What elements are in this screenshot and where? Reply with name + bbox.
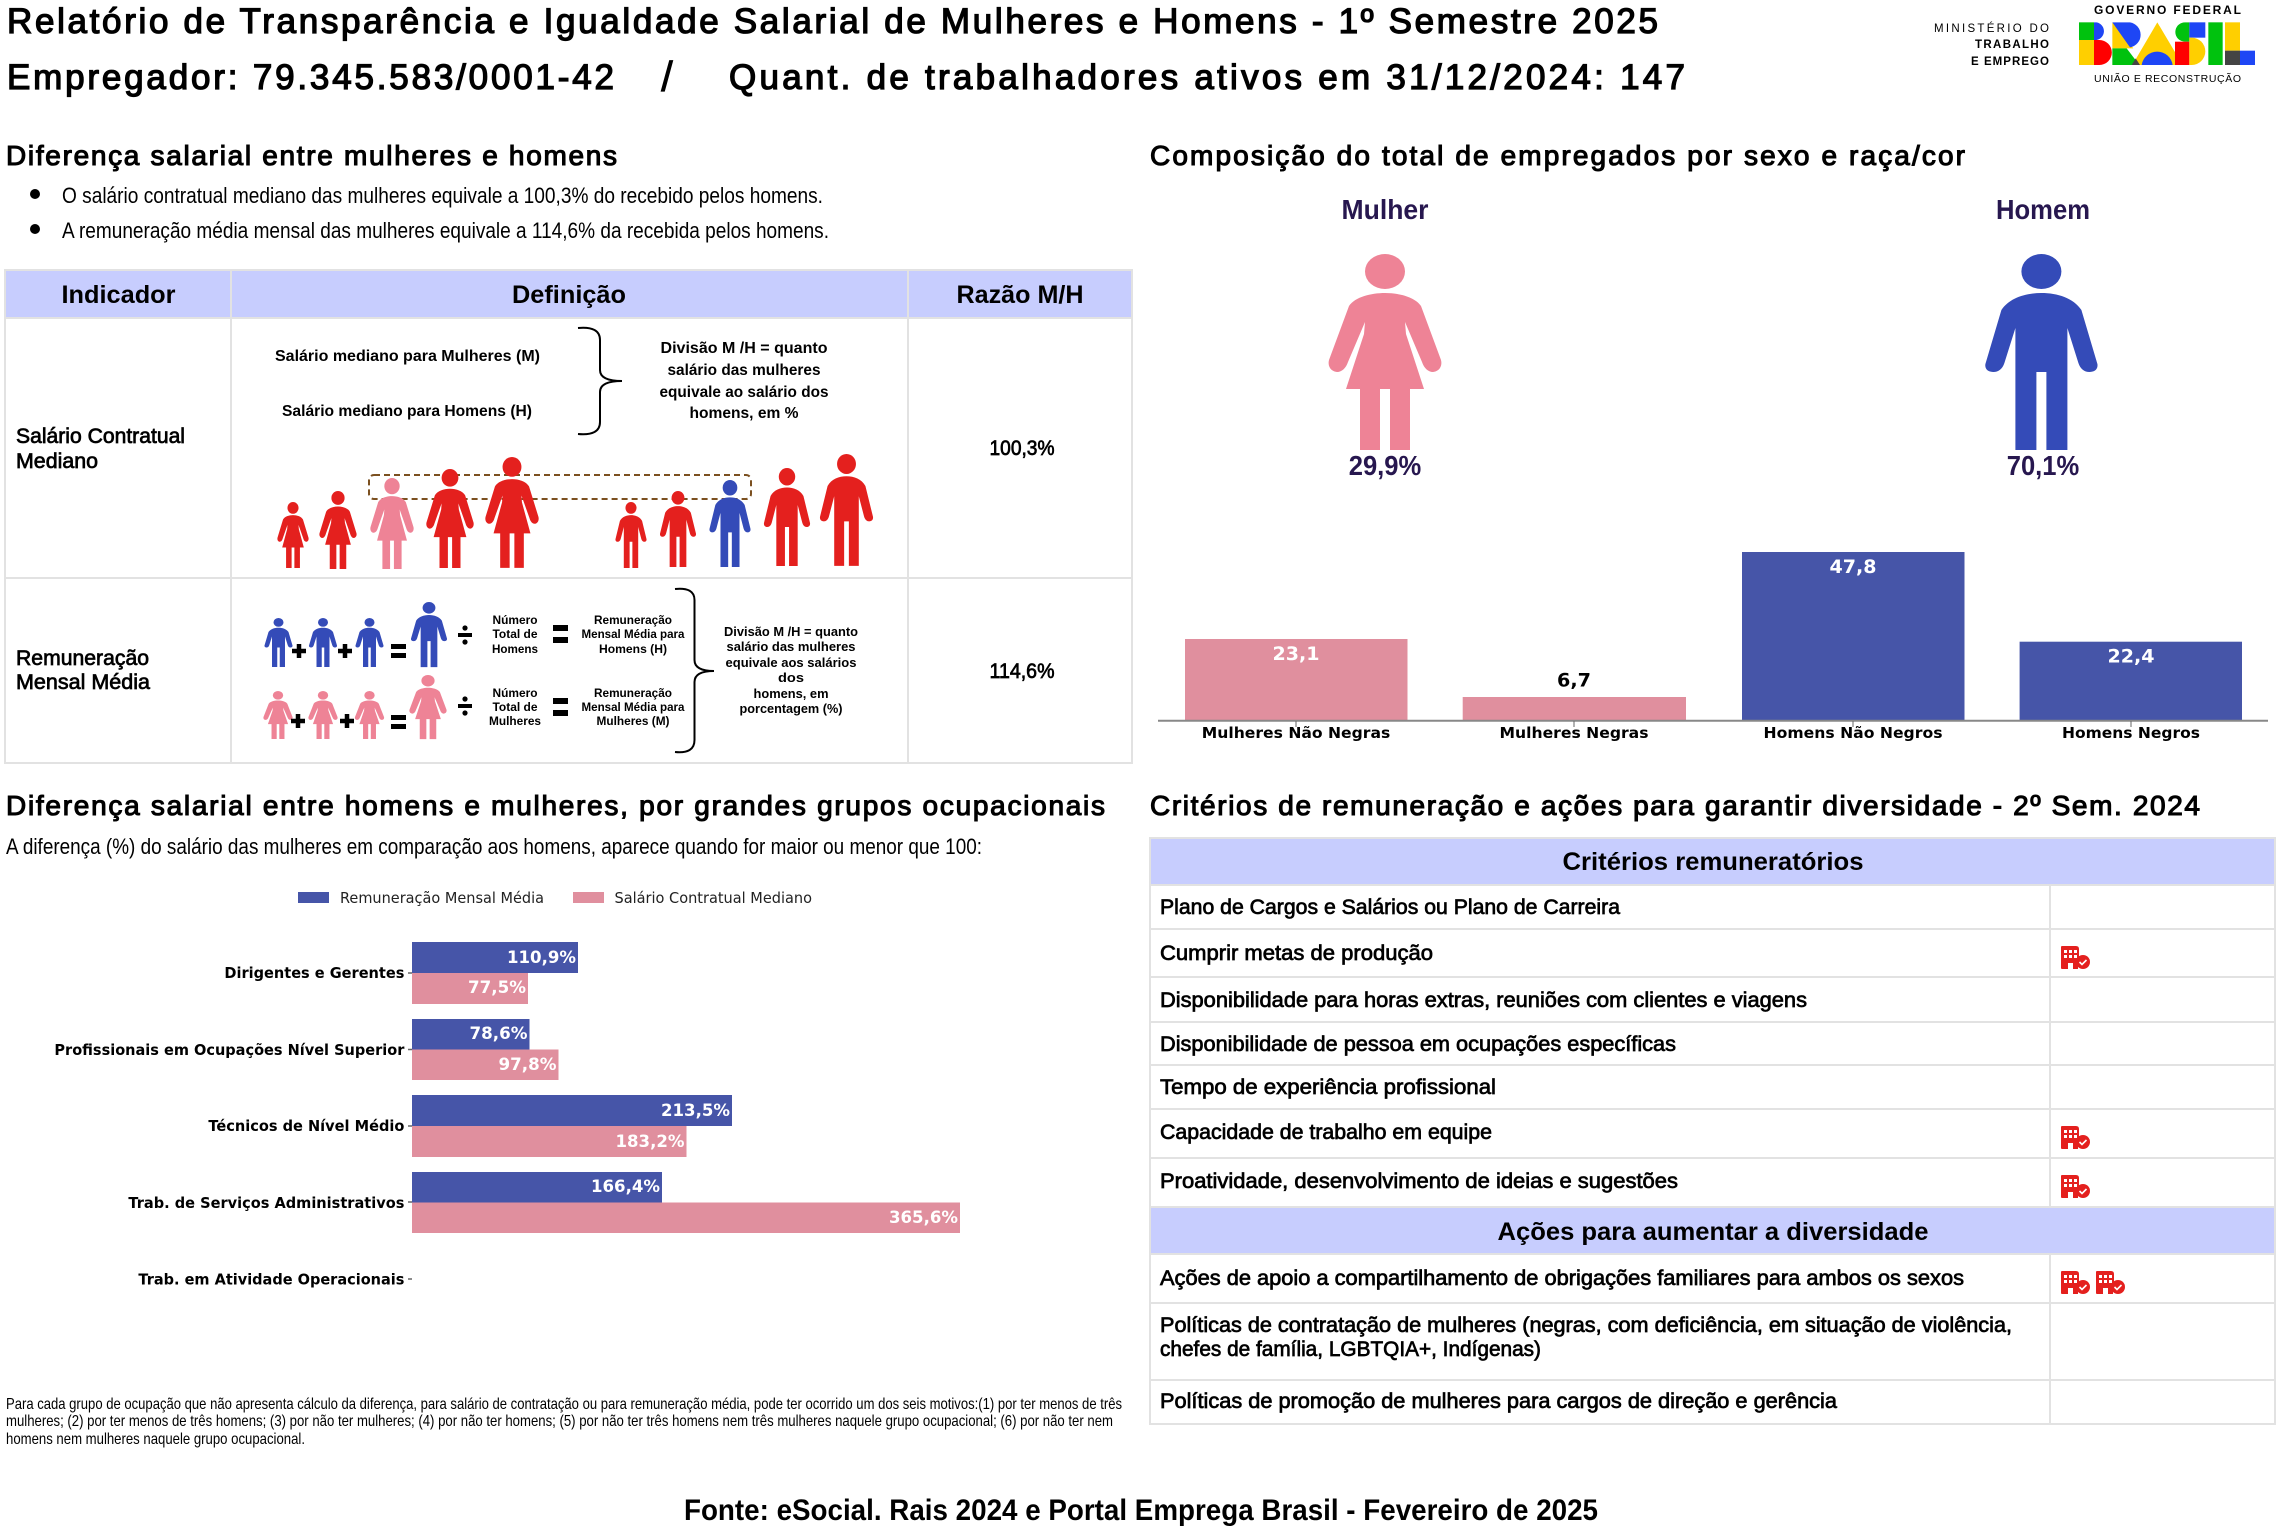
group: profissionais nível superior: 78,6%: [470, 1024, 528, 1044]
row label: remuneração mensal média: [16, 647, 150, 694]
row label: remuneração mensal média: Mensal Média: [16, 671, 150, 694]
formula labels: Número: [492, 686, 538, 700]
group: serviços administrativos: 365,6%: [889, 1208, 958, 1228]
brace and division text: [675, 589, 858, 752]
title: Empregador: 79.345.583/0001-42: [7, 58, 614, 97]
group: técnicos de nível médio: [208, 1095, 732, 1157]
pictogram: média de mulheres: [263, 675, 568, 739]
bar chart: sexo e raça/cor: 23,1: [1272, 643, 1320, 665]
criteria rows: Disponibilidade de pessoa em ocupações específicas: [1160, 1033, 1676, 1056]
section header: critérios remuneratórios: Critérios remuneratórios: [1562, 848, 1864, 876]
legend: Salário Contratual Mediano: [614, 889, 812, 907]
brace and division text: porcentagem (%): [740, 701, 842, 716]
formula labels: Mensal Média para: [582, 700, 685, 714]
definition: salário mediano: salário das mulheres: [668, 362, 821, 379]
percent: homem: 70,1%: [2007, 450, 2079, 481]
group: atividade operacionais: Trab. em Atividade Operacionais: [138, 1270, 404, 1288]
criteria rows: Plano de Cargos e Salários ou Plano de Carreira: [1160, 896, 1620, 919]
group: profissionais nível superior: Profissionais em Ocupações Nível Superior: [54, 1041, 405, 1059]
table header: Definição: [512, 281, 626, 309]
legend: [298, 889, 812, 907]
footnote: homens nem mulheres naquele grupo ocupacional.: [6, 1431, 305, 1448]
heading: critérios de remuneração: Critérios de remuneração e ações para garantir diversidade - 2º Sem. 2024: [1150, 790, 2200, 821]
panel: tabela de critérios: [1150, 838, 2275, 1424]
logo: ministério e governo federal: [1934, 3, 2255, 85]
title: /: [661, 53, 673, 100]
value: 114,6%: 114,6%: [990, 660, 1054, 683]
table header: [62, 281, 1084, 309]
bullet list: O salário contratual mediano das mulheres equivale a 100,3% do recebido pelos homens.: [62, 183, 823, 208]
heading: diferença salarial: Diferença salarial entre mulheres e homens: [6, 140, 617, 171]
definition: salário mediano: Divisão M /H = quanto: [660, 340, 828, 357]
section header: ações: Ações para aumentar a diversidade: [1498, 1218, 1929, 1246]
title: Quant. de trabalhadores ativos em 31/12/2024: 147: [729, 58, 1685, 97]
action rows: Políticas de contratação de mulheres (negras, com deficiência, em situação de violência,: [1160, 1314, 2012, 1337]
action rows: chefes de família, LGBTQIA+, Indígenas): [1160, 1338, 1541, 1361]
formula labels: Mulheres (M): [596, 714, 670, 728]
logo: ministério e governo federal: MINISTÉRIO DO: [1934, 22, 2049, 35]
logo: ministério e governo federal: TRABALHO: [1975, 39, 2049, 51]
definition: salário mediano: homens, em %: [690, 405, 798, 422]
formula labels: [489, 613, 685, 728]
icon: empresa em metas de produção: [2061, 946, 2090, 969]
action rows: Políticas de promoção de mulheres para cargos de direção e gerência: [1160, 1390, 1837, 1413]
row label: remuneração mensal média: Remuneração: [16, 647, 149, 670]
bullet list: [30, 183, 829, 243]
group: serviços administrativos: 166,4%: [591, 1177, 660, 1197]
panel: mulher: [1329, 194, 1441, 481]
panel: tabela de indicadores: [5, 270, 1132, 763]
row label: salário contratual mediano: [16, 425, 185, 473]
formula labels: Remuneração: [594, 686, 672, 700]
title: Relatório de Transparência e Igualdade Salarial de Mulheres e Homens - 1º Semestre 2025: [7, 2, 1658, 41]
footnote: mulheres; (2) por ter menos de três homens; (3) por não ter mulheres; (4) por não ter homens; (5) por não ter três homens nem três mulheres naquele grupo ocupacional; (6) por não ter nem: [6, 1413, 1113, 1430]
group: técnicos de nível médio: Técnicos de Nível Médio: [208, 1117, 404, 1135]
group: dirigentes e gerentes: 77,5%: [468, 978, 526, 998]
brace and division text: salário das mulheres: [726, 639, 856, 654]
bar chart: sexo e raça/cor: 6,7: [1557, 670, 1591, 692]
panel: homem: Homem: [1996, 194, 2090, 225]
group: dirigentes e gerentes: 110,9%: [507, 948, 576, 968]
definition: salário mediano: Salário mediano para Homens (H): [282, 403, 532, 420]
logo: ministério e governo federal: GOVERNO FEDERAL: [2094, 3, 2241, 17]
group: serviços administrativos: Trab. de Serviços Administrativos: [128, 1194, 404, 1212]
bar chart: sexo e raça/cor: 22,4: [2108, 646, 2154, 668]
source: Fonte: eSocial. Rais 2024 e Portal Emprega Brasil - Fevereiro de 2025: [684, 1494, 1598, 1527]
action rows: [1160, 1267, 2012, 1413]
formula labels: Homens: [492, 642, 538, 656]
criteria rows: Capacidade de trabalho em equipe: [1160, 1121, 1492, 1144]
pictogram: mediana de mulheres e homens: [277, 454, 873, 569]
formula labels: Número: [492, 613, 538, 627]
definition: salário mediano: [275, 328, 829, 434]
title: [7, 2, 1685, 100]
bar chart: sexo e raça/cor: Homens Negros: [2062, 724, 2200, 742]
heading: composição: Composição do total de empregados por sexo e raça/cor: [1150, 140, 1965, 171]
group: dirigentes e gerentes: [224, 942, 578, 1004]
criteria rows: Disponibilidade para horas extras, reuniões com clientes e viagens: [1160, 989, 1807, 1012]
group: dirigentes e gerentes: Dirigentes e Gerentes: [224, 964, 404, 982]
percent: mulher: 29,9%: [1349, 450, 1421, 481]
bullet list: A remuneração média mensal das mulheres equivale a 114,6% da recebida pelos homens.: [62, 218, 829, 243]
group: técnicos de nível médio: 213,5%: [661, 1101, 730, 1121]
brace and division text: dos: [778, 670, 804, 685]
icon: homem: [1985, 254, 2098, 450]
legend: Remuneração Mensal Média: [340, 889, 544, 907]
row label: salário contratual mediano: Mediano: [16, 450, 98, 473]
bar chart: sexo e raça/cor: Mulheres Não Negras: [1202, 724, 1390, 742]
panel: mulher: Mulher: [1342, 194, 1429, 225]
group: profissionais nível superior: [54, 1019, 558, 1080]
group: serviços administrativos: [128, 1172, 960, 1233]
group: técnicos de nível médio: 183,2%: [616, 1132, 684, 1152]
icon: mulher: [1329, 254, 1441, 450]
panel: homem: [1985, 194, 2098, 481]
brace and division text: equivale aos salários: [726, 655, 856, 670]
bar chart: sexo e raça/cor: [1158, 552, 2268, 742]
formula labels: Mulheres: [489, 714, 541, 728]
criteria rows: [1160, 896, 1807, 1193]
formula labels: Homens (H): [599, 642, 667, 656]
action rows: Ações de apoio a compartilhamento de obrigações familiares para ambos os sexos: [1160, 1267, 1964, 1290]
group: profissionais nível superior: 97,8%: [498, 1055, 556, 1075]
table header: Razão M/H: [956, 281, 1084, 309]
value: 100,3%: 100,3%: [990, 437, 1054, 460]
pictogram: média de homens: [264, 602, 568, 667]
footnote: [6, 1396, 1122, 1448]
icons: empresas em ações de apoio: [2061, 1271, 2125, 1294]
definition: salário mediano: equivale ao salário dos: [660, 384, 829, 401]
formula labels: Total de: [492, 627, 538, 641]
bar chart: sexo e raça/cor: 47,8: [1830, 556, 1876, 578]
logo: ministério e governo federal: E EMPREGO: [1971, 56, 2049, 68]
bar chart: sexo e raça/cor: Mulheres Negras: [1500, 724, 1649, 742]
brace and division text: Divisão M /H = quanto: [724, 624, 858, 639]
formula labels: Total de: [492, 700, 538, 714]
footnote: Para cada grupo de ocupação que não apresenta cálculo da diferença, para salário de contratação ou para remuneração média, pode ter ocorrido um dos seis motivos:(1) por ter menos de três: [6, 1396, 1122, 1413]
subheading: A diferença (%) do salário das mulheres em comparação aos homens, aparece quando for maior ou menor que 100:: [6, 834, 982, 859]
logo: ministério e governo federal: UNIÃO E RECONSTRUÇÃO: [2094, 72, 2241, 85]
icon: empresa em trabalho em equipe: [2061, 1126, 2090, 1149]
criteria rows: Cumprir metas de produção: [1160, 942, 1433, 965]
icon: empresa em proatividade: [2061, 1175, 2090, 1198]
formula labels: Remuneração: [594, 613, 672, 627]
row label: salário contratual mediano: Salário Contratual: [16, 425, 185, 448]
bar chart: sexo e raça/cor: Homens Não Negros: [1764, 724, 1943, 742]
bar chart: grupos ocupacionais: [54, 942, 960, 1288]
brace and division text: homens, em: [754, 686, 828, 701]
heading: grandes grupos ocupacionais: Diferença salarial entre homens e mulheres, por grandes grupos ocupacionais: [6, 790, 1105, 821]
definition: salário mediano: Salário mediano para Mulheres (M): [275, 348, 540, 365]
table header: Indicador: [62, 281, 176, 309]
criteria rows: Proatividade, desenvolvimento de ideias e sugestões: [1160, 1170, 1678, 1193]
formula labels: Mensal Média para: [582, 627, 685, 641]
criteria rows: Tempo de experiência profissional: [1160, 1076, 1496, 1099]
